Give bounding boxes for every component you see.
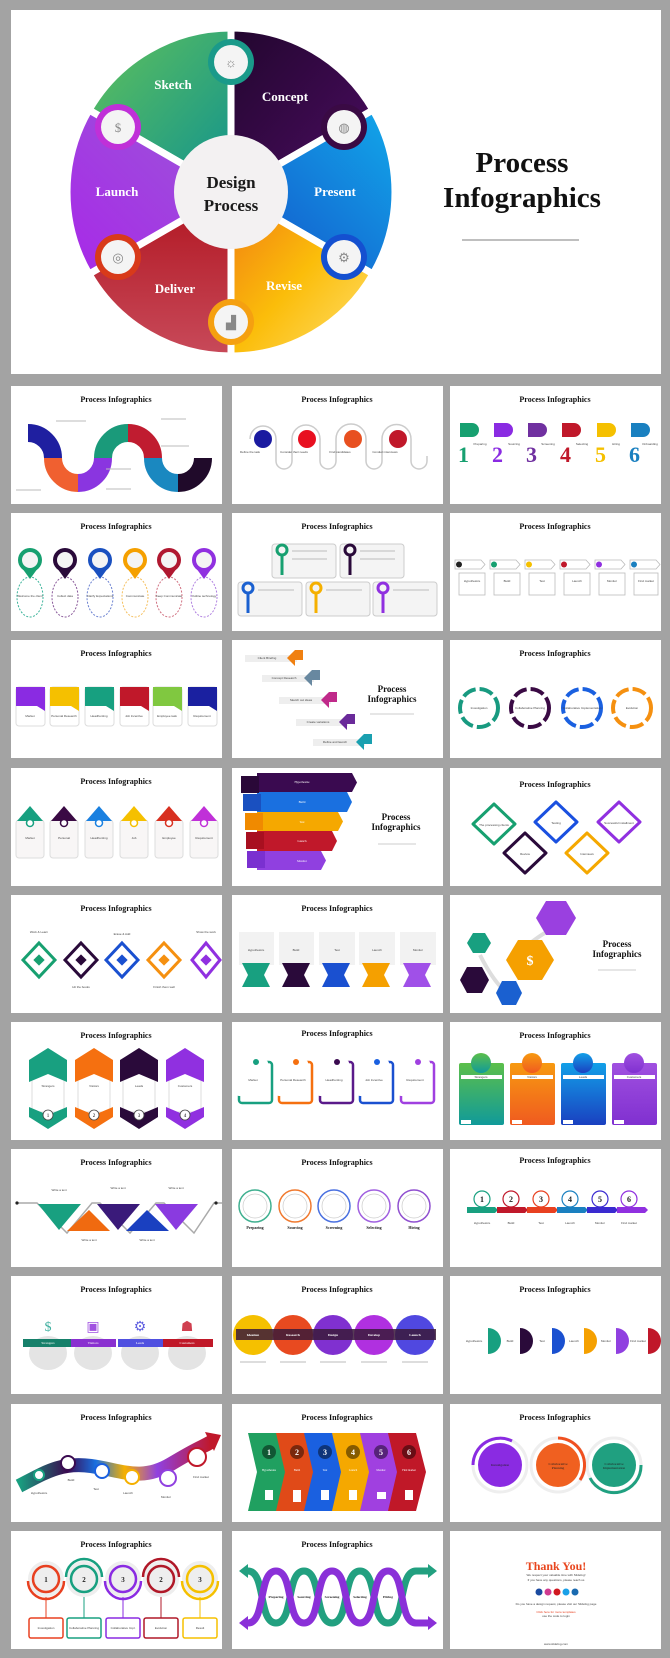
thumb 30: thank you: use the code to login xyxy=(542,1614,570,1618)
thumb 28: ring steps: 2 xyxy=(159,1576,163,1584)
thumb 7: colored tabs: Headhunting xyxy=(90,714,108,718)
thumb 3: numbered tabs: Process Infographics xyxy=(519,395,591,404)
thumb 7: colored tabs: Job Incentive xyxy=(125,714,143,718)
thumb 12: diamonds: Successful installment xyxy=(604,821,634,825)
thumb 14: cards with chevrons: Launch xyxy=(372,948,382,952)
thumb 9: rings: Process Infographics xyxy=(519,649,591,658)
thumb 26: chevron columns: 2 xyxy=(295,1448,299,1457)
thumb 26: chevron columns: 3 xyxy=(323,1448,327,1457)
thumb 25: wave ribbon: Build xyxy=(68,1478,75,1482)
thumb 28: ring steps: 1 xyxy=(44,1576,48,1584)
thumb 11: stacked arrows xyxy=(232,768,443,886)
thumb 20: ring icons: Screening xyxy=(326,1225,342,1230)
thumb 17: outlined cards: Headhunting xyxy=(325,1078,343,1082)
thumb 22: banners: ☗ xyxy=(181,1320,193,1335)
thumb 23: circles band: Ideation xyxy=(247,1333,259,1337)
thumb 7: colored tabs xyxy=(11,640,222,758)
center circle xyxy=(174,135,288,249)
thumb 12: diamonds: Review xyxy=(520,852,531,856)
thumb 9: rings xyxy=(450,640,661,758)
thumb 26: chevron columns: Monitor xyxy=(376,1469,386,1472)
thumb 13: small diamonds xyxy=(11,895,222,1013)
thumb 26: chevron columns: 4 xyxy=(351,1448,355,1457)
thumb 25: wave ribbon: Process Infographics xyxy=(80,1413,152,1422)
thumb 23: circles band: Launch xyxy=(409,1333,421,1337)
thumb 21: numbered timeline: Monitor xyxy=(595,1221,605,1225)
thumb 28: ring steps: 2 xyxy=(82,1576,86,1584)
hero title: Process xyxy=(476,147,568,179)
thumb 13: small diamonds: Erase & Add xyxy=(114,932,131,936)
thumb 21: numbered timeline: 4 xyxy=(568,1195,572,1204)
thumb 10: arrow cards: Headhunting xyxy=(90,836,108,840)
segment labels: Concept xyxy=(262,89,309,104)
thumb 10: arrow cards: Job xyxy=(132,836,137,840)
thumb 28: ring steps: 3 xyxy=(121,1576,125,1584)
thumb 23: circles band xyxy=(232,1276,443,1394)
thumb 3: numbered tabs: 4 xyxy=(560,442,571,467)
thumb 26: chevron columns: Build xyxy=(294,1469,301,1472)
icon: chart: ▟ xyxy=(225,314,237,331)
thumb 3: numbered tabs: Onboarding xyxy=(642,442,658,446)
icon: bulb: ☼ xyxy=(225,55,237,70)
thumb 18: colored step cards: Process Infographics xyxy=(519,1031,591,1040)
thumb 18: colored step cards: Strangers xyxy=(474,1075,488,1079)
thumb 17: outlined cards xyxy=(232,1022,443,1140)
thumb 16: hexagon columns: Process Infographics xyxy=(80,1031,152,1040)
thumb 25: wave ribbon: Launch xyxy=(123,1491,133,1495)
thumb 24: half circles: Hypothesize xyxy=(466,1339,483,1343)
thumb 28: ring steps: Process Infographics xyxy=(80,1540,152,1549)
thumb 24: half circles: Test xyxy=(539,1339,545,1343)
thumb 27: three circles: Planning xyxy=(552,1466,564,1470)
thumb 11: stacked arrows: Build xyxy=(299,800,306,804)
hero title: Infographics xyxy=(443,182,601,214)
segment labels: Sketch xyxy=(154,77,193,92)
thumb 8: stairs: Concept Research xyxy=(272,676,297,680)
thumb 12: diamonds: Testing xyxy=(551,821,561,825)
thumb 7: colored tabs: Requirement xyxy=(193,714,211,718)
thumb 10: arrow cards: Market xyxy=(25,836,35,840)
thumb 23: circles band: Process Infographics xyxy=(301,1285,373,1294)
thumb 8: stairs: Create variations xyxy=(307,720,330,724)
thumb 9: rings: Collaborative Implementation xyxy=(563,706,602,710)
thumb 28: ring steps: Evolution xyxy=(155,1626,168,1630)
thumb 15: hexagons: Process xyxy=(603,939,632,949)
thumb 2: circles path: Find candidates xyxy=(329,450,351,454)
thumb 9: rings: Collaborative Planning xyxy=(515,706,545,710)
thumb 3: numbered tabs xyxy=(450,386,661,504)
thumb 26: chevron columns xyxy=(232,1404,443,1522)
thumb 8: stairs: Infographics xyxy=(367,694,417,704)
thumb 28: ring steps xyxy=(11,1531,222,1649)
thumb 24: half circles: Monitor xyxy=(601,1339,611,1343)
thumb 21: numbered timeline: 5 xyxy=(598,1195,602,1204)
thumb 11: stacked arrows: Launch xyxy=(298,839,307,843)
thumb 26: chevron columns: Hypothesize xyxy=(262,1469,277,1472)
thumb 27: three circles: Implementation xyxy=(603,1466,625,1470)
thumb 21: numbered timeline: 2 xyxy=(509,1195,513,1204)
thumb 6: tags and boxes: Test xyxy=(539,579,545,583)
thumb 11: stacked arrows: Infographics xyxy=(371,822,421,832)
thumb 6: tags and boxes: Hypothesize xyxy=(464,579,481,583)
thumb 18: colored step cards xyxy=(450,1022,661,1140)
thumb 21: numbered timeline: 6 xyxy=(627,1195,631,1204)
thumb 8: stairs: Refine and launch xyxy=(323,740,347,744)
thumb 29: braid: Selecting xyxy=(353,1595,367,1599)
thumb 22: banners: Process Infographics xyxy=(80,1285,152,1294)
thumb 10: arrow cards: Personal xyxy=(58,836,70,840)
thumb 17: outlined cards: Requirement xyxy=(406,1078,424,1082)
thumb 4: pins: Keep Communicate xyxy=(156,594,182,598)
thumb 22: banners: $ xyxy=(44,1320,52,1335)
thumb 12: diamonds: Process Infographics xyxy=(519,780,591,789)
thumb 17: outlined cards: Market xyxy=(248,1078,258,1082)
thumb 3: numbered tabs: 2 xyxy=(492,442,503,467)
thumb 13: small diamonds: Finish them well xyxy=(153,985,175,989)
thumb 25: wave ribbon: Find market xyxy=(193,1475,209,1479)
thumb 28: ring steps: Investigation xyxy=(38,1626,55,1630)
thumb 28: ring steps: Collaborative Impl. xyxy=(111,1626,136,1630)
thumb 2: circles path: Conduct interviews xyxy=(372,450,398,454)
thumb 29: braid: Process Infographics xyxy=(301,1540,373,1549)
thumb 30: thank you: Click here for more templates xyxy=(536,1610,576,1614)
thumb 24: half circles: Build xyxy=(507,1339,514,1343)
thumb 26: chevron columns: 1 xyxy=(267,1448,271,1457)
thumb 11: stacked arrows: Process xyxy=(382,812,411,822)
thumb 18: colored step cards: Customers xyxy=(627,1075,642,1079)
icon: globe xyxy=(321,104,367,150)
thumb 6: tags and boxes: Find market xyxy=(638,579,654,583)
thumb 17: outlined cards: Process Infographics xyxy=(301,1029,373,1038)
segment labels: Present xyxy=(314,184,356,199)
thumb 8: stairs: Sketch out ideas xyxy=(290,698,313,702)
thumb 13: small diamonds: Show the work xyxy=(196,930,216,934)
thumb 2: circles path: Define the task xyxy=(240,450,261,454)
thumb 15: hexagons: $ xyxy=(526,954,534,969)
thumb 29: braid: Sourcing xyxy=(297,1595,311,1599)
thumb 21: numbered timeline: Build xyxy=(508,1221,515,1225)
thumb 20: ring icons: Process Infographics xyxy=(301,1158,373,1167)
segment labels: Revise xyxy=(266,278,302,293)
thumb 29: braid xyxy=(232,1531,443,1649)
thumb 8: stairs xyxy=(232,640,443,758)
thumb 14: cards with chevrons: Monitor xyxy=(413,948,423,952)
thumb 30: thank you: If you have any questions, please reach us xyxy=(528,1578,585,1582)
thumb 14: cards with chevrons xyxy=(232,895,443,1013)
thumb 19: zigzag triangles: Write a text xyxy=(110,1186,126,1190)
thumb 24: half circles xyxy=(450,1276,661,1394)
segment labels: Launch xyxy=(96,184,139,199)
thumb 16: hexagon columns: 4 xyxy=(184,1114,187,1119)
thumb 18: colored step cards: Visitors xyxy=(527,1075,537,1079)
thumb 22: banners: Visitors xyxy=(88,1341,99,1345)
thumb 20: ring icons: Hiring xyxy=(408,1225,420,1230)
thumb 29: braid: Hiring xyxy=(383,1595,393,1599)
thumb 30: thank you: www.slidefog.com xyxy=(544,1642,569,1646)
thumb 13: small diamonds: Process Infographics xyxy=(80,904,152,913)
thumb 7: colored tabs: Personal Research xyxy=(51,714,77,718)
thumb 3: numbered tabs: Preparing xyxy=(473,442,487,446)
thumb 10: arrow cards: Process Infographics xyxy=(80,777,152,786)
thumb 16: hexagon columns xyxy=(11,1022,222,1140)
thumb 16: hexagon columns: Visitors xyxy=(89,1084,99,1088)
thumb 2: circles path: Process Infographics xyxy=(301,395,373,404)
icon: bulb xyxy=(208,39,254,85)
thumb 27: three circles: Collaborative xyxy=(548,1462,568,1466)
thumb 21: numbered timeline: Process Infographics xyxy=(519,1156,591,1165)
thumb 25: wave ribbon xyxy=(11,1404,222,1522)
thumb 10: arrow cards: Requirement xyxy=(195,836,213,840)
thumb 11: stacked arrows: Test xyxy=(300,820,305,824)
segment labels: Deliver xyxy=(155,281,195,296)
thumb 22: banners: Strangers xyxy=(41,1341,55,1345)
thumb 26: chevron columns: Test xyxy=(323,1469,328,1472)
thumb 1: snake: Process Infographics xyxy=(80,395,152,404)
thumb 3: numbered tabs: 6 xyxy=(629,442,640,467)
icon: chart xyxy=(208,299,254,345)
thumb 27: three circles: Collaborative xyxy=(604,1462,624,1466)
thumb 23: circles band: Develop xyxy=(368,1333,380,1337)
thumb 14: cards with chevrons: Hypothesize xyxy=(248,948,265,952)
thumb 10: arrow cards xyxy=(11,768,222,886)
thumb 23: circles band: Design xyxy=(328,1333,338,1337)
thumb 3: numbered tabs: Selecting xyxy=(576,442,589,446)
thumb 20: ring icons xyxy=(232,1149,443,1267)
thumb 23: circles band: Research xyxy=(286,1333,300,1337)
hero slide xyxy=(11,10,661,374)
thumb 25: wave ribbon: Test xyxy=(93,1487,99,1491)
thumb 4: pins xyxy=(11,513,222,631)
thumb 9: rings: Investigation xyxy=(471,706,488,710)
thumb 20: ring icons: Preparing xyxy=(246,1225,264,1230)
thumb 14: cards with chevrons: Process Infographics xyxy=(301,904,373,913)
thumb 7: colored tabs: Process Infographics xyxy=(80,649,152,658)
thumb 29: braid: Preparing xyxy=(268,1595,284,1599)
thumb 4: pins: Collect data xyxy=(57,594,73,598)
thumb 21: numbered timeline: Test xyxy=(538,1221,544,1225)
thumb 22: banners: ⚙ xyxy=(134,1320,146,1335)
thumb 19: zigzag triangles: Write a text xyxy=(81,1238,97,1242)
thumb 22: banners: ▣ xyxy=(86,1320,100,1335)
thumb 4: pins: Process Infographics xyxy=(80,522,152,531)
thumb 16: hexagon columns: Leads xyxy=(135,1084,144,1088)
design process wheel xyxy=(67,28,395,356)
thumb 6: tags and boxes: Launch xyxy=(572,579,582,583)
thumb 5: cards with pins: Process Infographics xyxy=(301,522,373,531)
segment: Revise xyxy=(231,192,373,356)
thumb 16: hexagon columns: 2 xyxy=(93,1114,96,1119)
thumb 3: numbered tabs: Sourcing xyxy=(508,442,520,446)
thumb 12: diamonds xyxy=(450,768,661,886)
thumb 28: ring steps: Collaborative Planning xyxy=(69,1626,99,1630)
thumb 27: three circles xyxy=(450,1404,661,1522)
thumb 19: zigzag triangles: Write a text xyxy=(139,1238,155,1242)
thumb 16: hexagon columns: 3 xyxy=(138,1114,141,1119)
thumb 26: chevron columns: 6 xyxy=(407,1448,411,1457)
segment: Sketch xyxy=(89,28,231,192)
thumb 14: cards with chevrons: Build xyxy=(293,948,300,952)
thumb 3: numbered tabs: Screening xyxy=(541,442,555,446)
thumb 21: numbered timeline xyxy=(450,1149,661,1267)
thumb 22: banners: Leads xyxy=(136,1341,145,1345)
icon: gears: ⚙ xyxy=(338,250,350,265)
thumb 8: stairs: Process xyxy=(378,684,407,694)
segment: Concept xyxy=(231,28,373,192)
thumb 17: outlined cards: Job Incentive xyxy=(365,1078,383,1082)
thumb 29: braid: Screening xyxy=(325,1595,340,1599)
thumb 4: pins: Communicate xyxy=(126,594,145,598)
thumb 21: numbered timeline: 1 xyxy=(480,1195,484,1204)
thumb 15: hexagons: Infographics xyxy=(592,949,642,959)
segment labels xyxy=(96,77,356,296)
thumb 11: stacked arrows: Monitor xyxy=(297,859,307,863)
icon: target xyxy=(95,234,141,280)
thumb 3: numbered tabs: 3 xyxy=(526,442,537,467)
thumb 26: chevron columns: Find market xyxy=(402,1469,416,1472)
thumb 27: three circles: Investigation xyxy=(491,1463,509,1467)
thumb 26: chevron columns: Launch xyxy=(349,1469,358,1472)
thumb 14: cards with chevrons: Test xyxy=(334,948,340,952)
thumb 26: chevron columns: 5 xyxy=(379,1448,383,1457)
thumb 25: wave ribbon: Hypothesize xyxy=(31,1491,48,1495)
thumb 27: three circles: Process Infographics xyxy=(519,1413,591,1422)
thumb 1: snake xyxy=(11,386,222,504)
thumb 22: banners: Customers xyxy=(180,1341,195,1345)
thumb 12: diamonds: The processing clients xyxy=(479,823,509,827)
thumb 3: numbered tabs: 1 xyxy=(458,442,469,467)
hero title xyxy=(443,147,601,214)
thumb 13: small diamonds: Hit the books xyxy=(72,985,90,989)
thumb 20: ring icons: Sourcing xyxy=(287,1225,303,1230)
thumb 21: numbered timeline: Hypothesize xyxy=(474,1221,491,1225)
thumb 6: tags and boxes: Build xyxy=(504,579,511,583)
thumb 24: half circles: Process Infographics xyxy=(519,1285,591,1294)
thumb 30: thank you: Thank You! xyxy=(526,1559,586,1573)
thumb 21: numbered timeline: 3 xyxy=(539,1195,543,1204)
thumb 4: pins: Welcome the client xyxy=(17,594,43,598)
thumb 19: zigzag triangles: Write a text xyxy=(168,1186,184,1190)
thumb 24: half circles: Launch xyxy=(569,1339,579,1343)
thumb 24: half circles: Find market xyxy=(630,1339,646,1343)
thumb 12: diamonds: Interviews xyxy=(580,852,594,856)
thumb 30: thank you: Do you have a design request, please visit our Slidefog page xyxy=(516,1602,597,1606)
thumb 21: numbered timeline: Find market xyxy=(621,1221,637,1225)
thumb 21: numbered timeline: Launch xyxy=(565,1221,575,1225)
thumb 30: thank you: We respect your valuable time with Slidefog! xyxy=(527,1573,586,1577)
thumb 30: thank you xyxy=(450,1531,661,1649)
segment: Deliver xyxy=(89,192,231,356)
icon: globe: ◍ xyxy=(338,120,350,135)
thumb 4: pins: Clarify Expectations xyxy=(87,594,114,598)
thumb 3: numbered tabs: Hiring xyxy=(612,442,620,446)
thumb 7: colored tabs: Market xyxy=(25,714,35,718)
thumb 28: ring steps: 3 xyxy=(198,1576,202,1584)
thumb 16: hexagon columns: Strangers xyxy=(41,1084,55,1088)
thumb 15: hexagons xyxy=(450,895,661,1013)
thumb 16: hexagon columns: Customers xyxy=(178,1084,193,1088)
icon: dollar xyxy=(95,104,141,150)
thumb 7: colored tabs: Employee task xyxy=(157,714,177,718)
segment: Present xyxy=(231,110,395,274)
thumb 10: arrow cards: Employee xyxy=(162,836,176,840)
thumb 26: chevron columns: Process Infographics xyxy=(301,1413,373,1422)
icon: target: ◎ xyxy=(112,250,124,265)
thumb 19: zigzag triangles: Process Infographics xyxy=(80,1158,152,1167)
thumb 11: stacked arrows: Hypothesize xyxy=(294,780,310,784)
thumb 4: pins: Outline technology xyxy=(192,594,217,598)
thumb 20: ring icons: Selecting xyxy=(366,1225,382,1230)
icon: gears xyxy=(321,234,367,280)
center circle: Process xyxy=(204,196,259,215)
thumb 2: circles path xyxy=(232,386,443,504)
center circle: Design xyxy=(206,173,256,192)
thumb 3: numbered tabs: 5 xyxy=(595,442,606,467)
thumb 17: outlined cards: Personal Research xyxy=(280,1078,306,1082)
thumb 9: rings: Evolution xyxy=(626,706,639,710)
segment: Launch xyxy=(67,110,231,274)
thumb 19: zigzag triangles: Write a text xyxy=(51,1188,67,1192)
thumb 8: stairs: Client Briefing xyxy=(258,656,277,660)
thumb 25: wave ribbon: Monitor xyxy=(161,1495,171,1499)
thumb 19: zigzag triangles xyxy=(11,1149,222,1267)
thumb 2: circles path: Consider their needs xyxy=(280,450,308,454)
thumb 22: banners xyxy=(11,1276,222,1394)
thumb 18: colored step cards: Leads xyxy=(579,1075,588,1079)
thumb 6: tags and boxes: Monitor xyxy=(607,579,617,583)
icon: dollar: $ xyxy=(115,120,122,135)
thumb 13: small diamonds: Work & Learn xyxy=(30,930,48,934)
thumb 16: hexagon columns: 1 xyxy=(47,1114,50,1119)
thumb 6: tags and boxes xyxy=(450,513,661,631)
thumb 6: tags and boxes: Process Infographics xyxy=(519,522,591,531)
thumb 5: cards with pins xyxy=(232,513,443,631)
thumb 28: ring steps: Result xyxy=(196,1626,204,1630)
